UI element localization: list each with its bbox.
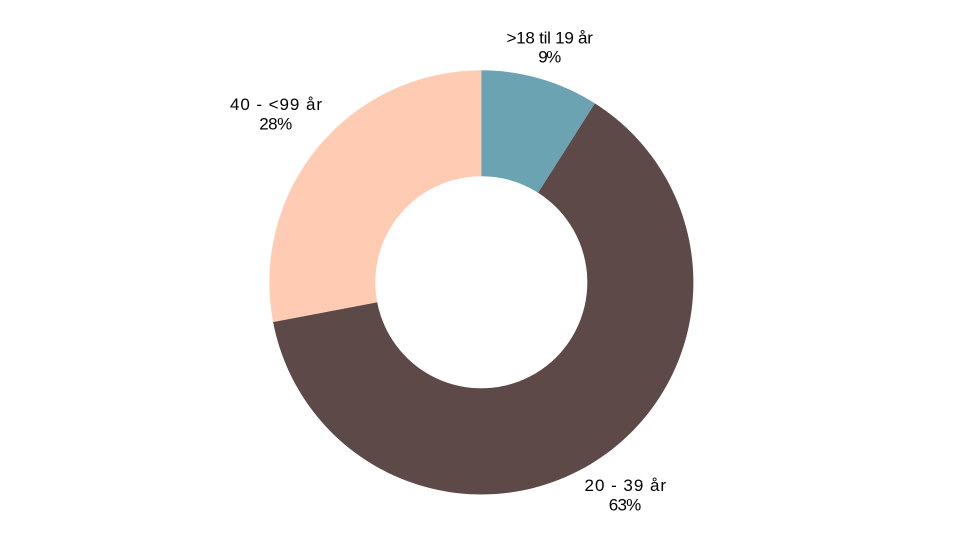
label: 18 to 19 years: 9% — [538, 48, 561, 67]
slice: 18 to 19 years, 9% — [481, 70, 595, 193]
slice: 20 to 39 years, 63% — [273, 103, 693, 494]
label: 20 to 39 years: 63% — [609, 496, 641, 515]
label: 20 to 39 years — [585, 476, 666, 515]
label: 20 to 39 years: 20 - 39 år — [585, 476, 666, 495]
label: 40 to 99 years — [230, 95, 322, 133]
label: 18 to 19 years — [506, 28, 593, 67]
label: 18 to 19 years: >18 til 19 år — [506, 28, 593, 47]
label: 40 to 99 years: 40 - <99 år — [230, 95, 322, 114]
donut slices — [269, 70, 693, 494]
label: 40 to 99 years: 28% — [259, 114, 292, 133]
slice: 40 to 99 years, 28% — [269, 70, 481, 322]
